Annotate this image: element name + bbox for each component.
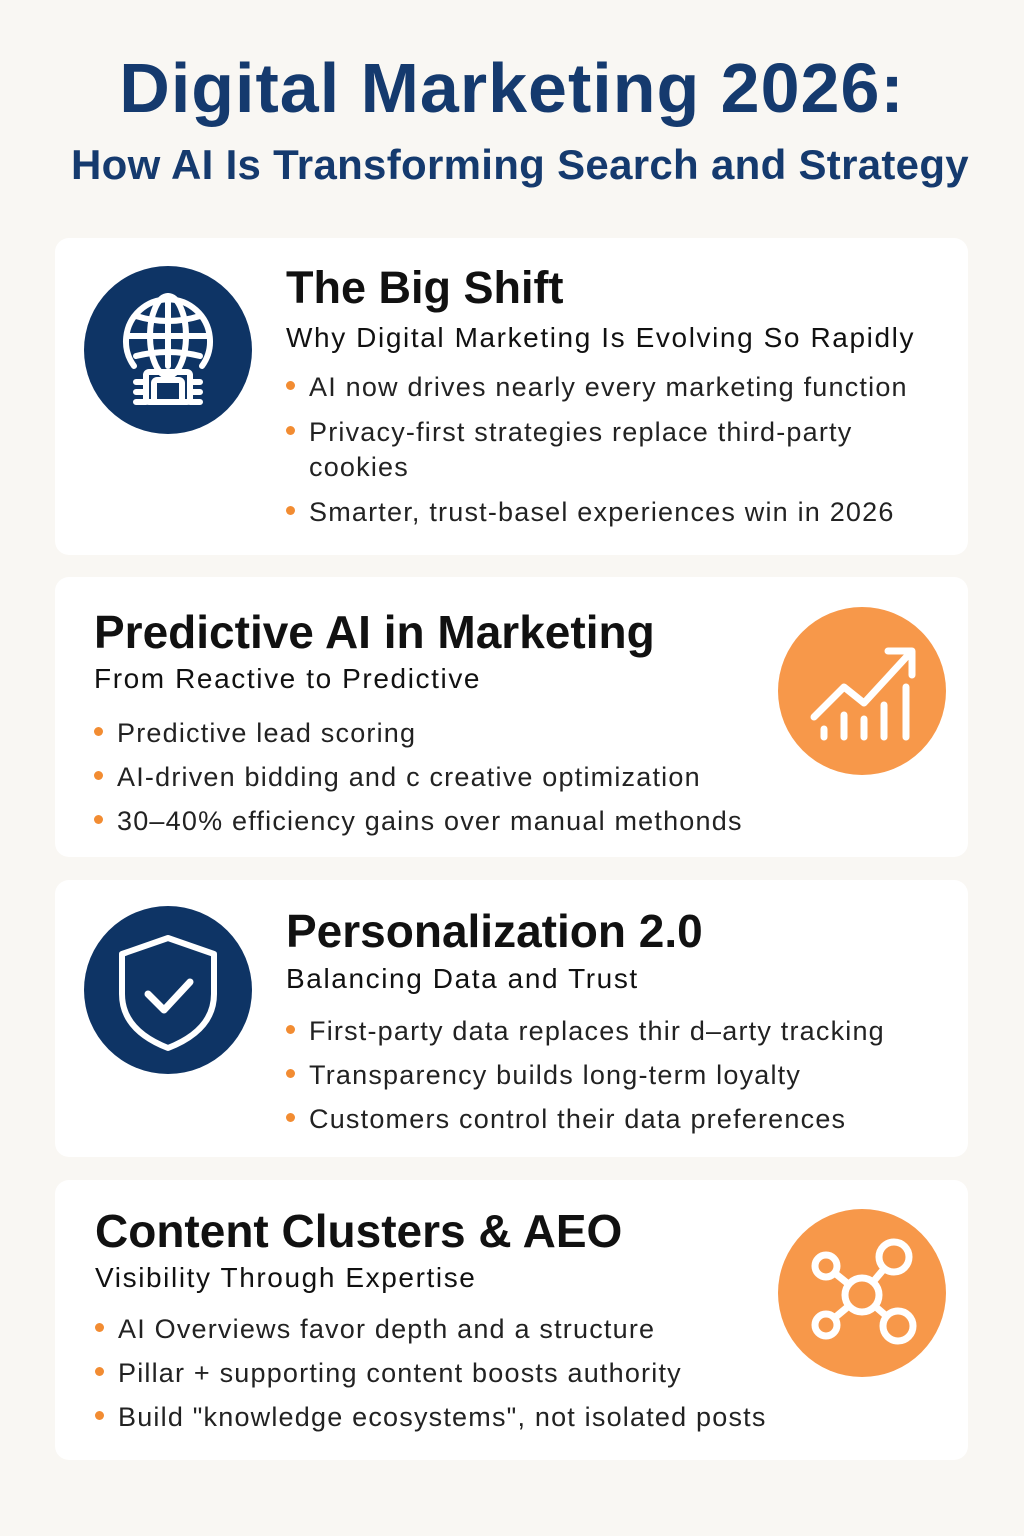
bullets: First-party data replaces thir d–arty tracking	[309, 1016, 885, 1046]
bullets: Customers control their data preferences	[309, 1104, 846, 1134]
heading: Predictive AI in Marketing	[94, 606, 655, 658]
panel: content clusters	[55, 1180, 968, 1460]
subheading: Visibility Through Expertise	[95, 1262, 476, 1293]
heading: The Big Shift	[286, 262, 563, 313]
icon: network nodes	[778, 1209, 946, 1377]
bullets	[286, 372, 908, 527]
bullets	[94, 718, 743, 836]
bullets: AI Overviews favor depth and a structure	[118, 1314, 655, 1344]
subheading: Balancing Data and Trust	[286, 963, 639, 994]
bullets: Build "knowledge ecosystems", not isolated posts	[118, 1402, 767, 1432]
subheading: Why Digital Marketing Is Evolving So Rapidly	[286, 322, 915, 353]
heading: Personalization 2.0	[286, 905, 703, 957]
bullets: Transparency builds long-term loyalty	[309, 1060, 801, 1090]
bullets: 30–40% efficiency gains over manual methonds	[117, 806, 743, 836]
bullets: Predictive lead scoring	[117, 718, 416, 748]
subtitle: How AI Is Transforming Search and Strategy	[71, 141, 969, 188]
bullets: AI-driven bidding and c creative optimization	[117, 762, 701, 792]
subheading: From Reactive to Predictive	[94, 663, 481, 694]
panel: predictive AI	[55, 577, 968, 857]
icon: growth chart	[778, 607, 946, 775]
title: Digital Marketing 2026:	[119, 49, 905, 127]
bullets: Smarter, trust-basel experiences win in 2026	[309, 497, 895, 527]
panel: the big shift	[55, 238, 968, 555]
heading: Content Clusters & AEO	[95, 1205, 622, 1257]
bullets: Privacy-first strategies replace third-party	[309, 417, 852, 447]
panel: personalization	[55, 880, 968, 1157]
bullets	[95, 1314, 767, 1432]
icon: globe with chip	[84, 266, 252, 434]
bullets	[286, 1016, 885, 1134]
bullets: Pillar + supporting content boosts authority	[118, 1358, 682, 1388]
bullets: AI now drives nearly every marketing function	[309, 372, 908, 402]
icon: shield check	[84, 906, 252, 1074]
bullets: cookies	[309, 452, 409, 482]
